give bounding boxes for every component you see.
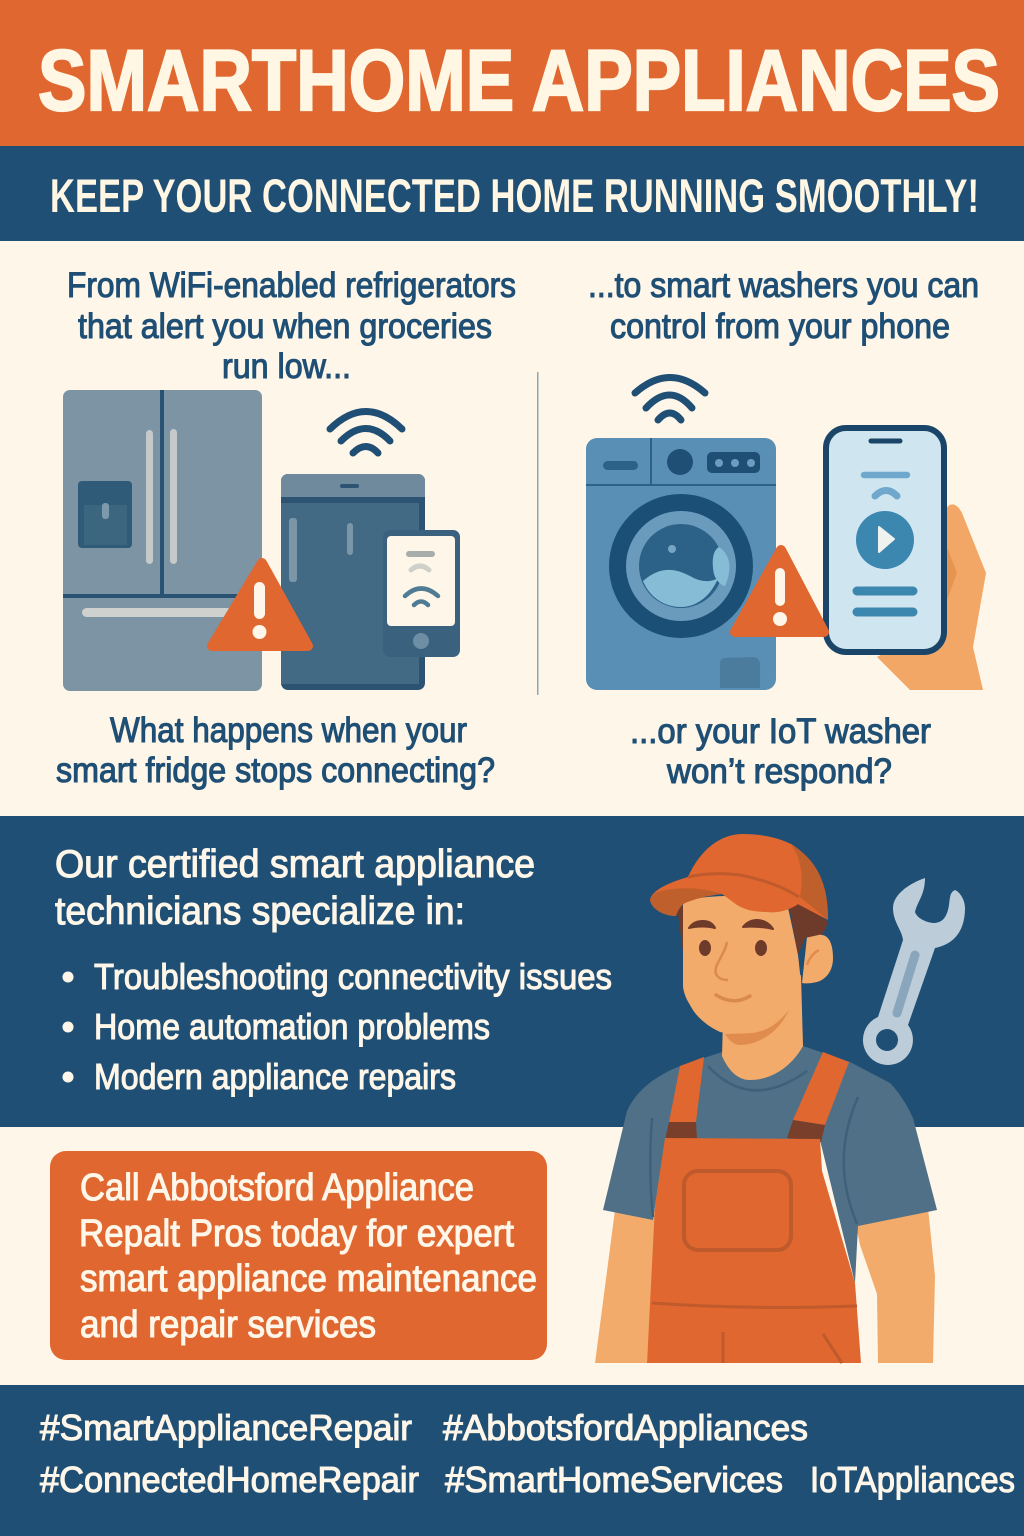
callout: call to action: and repair services	[80, 1304, 376, 1346]
text: washer intro	[588, 266, 979, 346]
subtitle banner	[0, 146, 1024, 241]
text: washer question	[630, 712, 931, 791]
icon: warning triangle washer	[735, 550, 824, 632]
heading: technicians	[55, 843, 535, 933]
heading: technicians: Our certified smart appliance	[55, 843, 535, 886]
icon: phone with wifi status	[383, 530, 460, 657]
footer: hashtags: #SmartHomeServices	[445, 1459, 783, 1500]
icon: smart fridge	[281, 474, 425, 690]
ear	[802, 934, 833, 983]
title banner	[0, 0, 1024, 146]
footer: hashtags: #AbbotsfordAppliances	[443, 1407, 808, 1448]
face	[683, 896, 801, 1034]
icon: wrench	[863, 878, 965, 1065]
eyes and mouth	[689, 920, 773, 1001]
icon: warning triangle fridge	[212, 563, 308, 646]
list: specialties: Home automation problems	[94, 1006, 490, 1047]
footer: hashtags	[0, 1385, 1024, 1536]
icon: hand holding phone	[877, 504, 986, 690]
callout: call to action: Repalt Pros today for expert	[79, 1213, 514, 1255]
text: fridge intro	[67, 266, 516, 386]
icon: wifi above smart fridge	[330, 412, 402, 453]
text: fridge question: smart fridge stops connecting?	[56, 751, 495, 790]
cap	[650, 834, 828, 920]
icon: smartphone app	[826, 428, 944, 652]
list: specialties: Modern appliance repairs	[94, 1056, 456, 1097]
list: specialties	[63, 956, 612, 1097]
text: washer intro: ...to smart washers you can	[588, 266, 979, 305]
footer: hashtags: #ConnectedHomeRepair	[40, 1459, 419, 1500]
text: fridge intro: run low...	[222, 347, 351, 386]
hair	[677, 900, 828, 955]
icon: washing machine	[586, 438, 776, 690]
text: washer intro: control from your phone	[610, 307, 950, 346]
text: fridge intro: that alert you when groceries	[78, 307, 492, 346]
text: fridge question	[56, 711, 495, 790]
callout: call to action	[50, 1151, 547, 1360]
icon: french door refrigerator	[63, 390, 262, 691]
text: washer question: ...or your IoT washer	[630, 712, 931, 751]
text: fridge intro: From WiFi-enabled refrigerators	[67, 266, 516, 305]
illustration: technician	[595, 834, 937, 1363]
footer: hashtags: #SmartApplianceRepair	[40, 1407, 412, 1448]
heading: technicians: technicians specialize in:	[55, 890, 465, 933]
panel: technicians	[0, 816, 1024, 1127]
icon: wifi above washer	[635, 378, 705, 420]
text: fridge question: What happens when your	[110, 711, 467, 750]
text: washer question: won’t respond?	[666, 752, 892, 791]
callout: call to action: smart appliance maintenance	[80, 1258, 537, 1300]
arms	[595, 1208, 935, 1363]
neck	[722, 975, 803, 1080]
shirt	[603, 1046, 937, 1283]
list: specialties: Troubleshooting connectivity issues	[94, 956, 612, 997]
overalls	[647, 1052, 861, 1363]
callout: call to action: Call Abbotsford Appliance	[80, 1167, 474, 1209]
